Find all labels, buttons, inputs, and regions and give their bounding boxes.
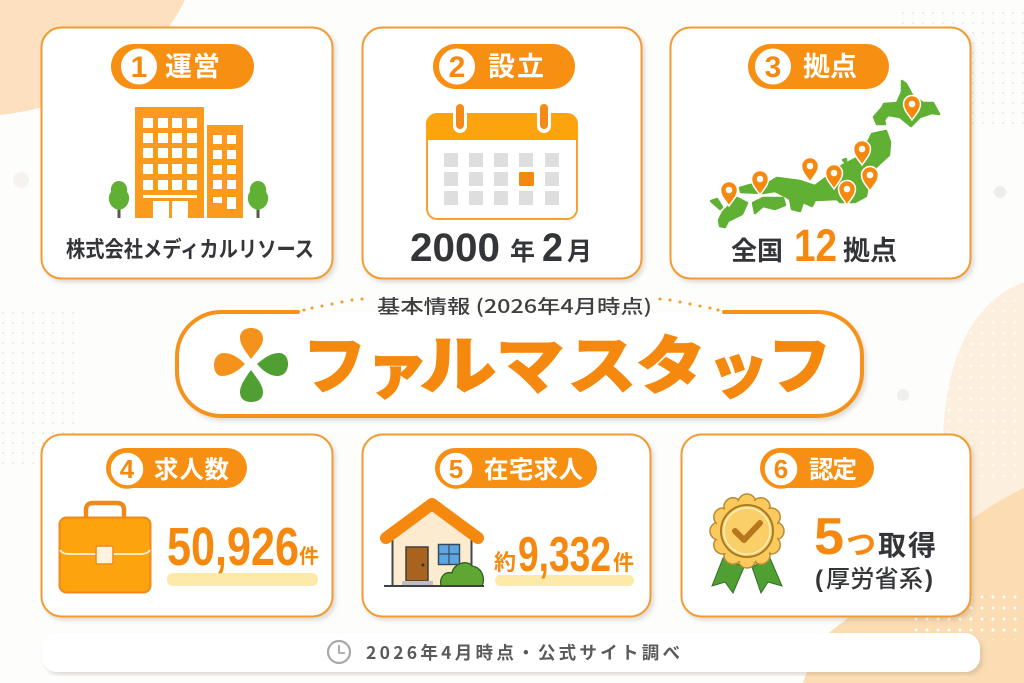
map of Japan [711, 81, 939, 227]
badge: 5 在宅求人 [435, 448, 597, 488]
title text: ス [568, 332, 636, 402]
title text: ァ [366, 337, 428, 406]
icon: tree right [248, 181, 268, 218]
badge: 4 求人数 [106, 448, 247, 488]
badge: 4 求人数: 4 [120, 454, 135, 484]
panel: 1 運営 [42, 28, 332, 278]
badge: 1 運営 [111, 44, 254, 89]
badge: 2 設立: 設立 [488, 45, 544, 84]
badge: 2 設立 [433, 44, 575, 89]
value: 5つ取得: 5 [814, 508, 844, 566]
founding date: 年 [510, 232, 535, 268]
title text: タ [636, 332, 706, 402]
icon: office buildings [135, 107, 243, 218]
background blob: bottom right [803, 488, 1024, 683]
badge: 2 設立: 2 [449, 51, 465, 84]
panel: 5 在宅求人 [362, 434, 650, 616]
section heading: 基本情報 (2026年4月時点) [377, 292, 652, 319]
badge: 3 拠点: 3 [765, 51, 781, 84]
value: 約9,332件: 件 [613, 547, 634, 577]
icon: clock [328, 641, 350, 663]
icon: medal [710, 494, 784, 593]
locations count [731, 220, 897, 271]
badge: 6 認定: 認定 [809, 451, 857, 486]
icon: briefcase [60, 503, 150, 592]
locations count: 全国 [731, 231, 783, 268]
badge: 1 運営: 1 [131, 51, 147, 84]
badge: 3 拠点 [748, 44, 889, 89]
badge: 4 求人数: 求人数 [154, 451, 230, 486]
value: 50,926件: 50,926 [167, 517, 299, 577]
note: 厚労省系: ) [925, 566, 933, 593]
panel: 6 認定 [682, 434, 970, 616]
value: 約9,332件: 9,332 [518, 528, 611, 582]
title text: マ [496, 332, 564, 402]
founding date: 2000 [410, 226, 500, 270]
icon: house [384, 504, 484, 586]
badge: 6 認定: 6 [774, 454, 788, 484]
title text: フ [768, 332, 831, 402]
title text: ル [420, 332, 496, 402]
badge: 3 拠点: 拠点 [803, 45, 857, 84]
value: 約9,332件: 約 [494, 545, 516, 577]
founding date: 月 [567, 232, 592, 268]
badge: 6 認定 [760, 448, 874, 488]
note: 厚労省系: 厚労省系 [826, 559, 923, 594]
background blob: top left [0, 0, 185, 115]
title text [303, 332, 831, 406]
badge: 5 在宅求人: 在宅求人 [484, 451, 584, 486]
title frame [177, 312, 862, 416]
panel: 2 設立 [362, 28, 642, 278]
company name: 株式会社メディカルリソース [66, 232, 314, 264]
footer note bar [42, 633, 980, 672]
panel: 3 拠点 [670, 28, 970, 278]
value: 50,926件: 件 [299, 540, 319, 569]
footer text: 2026年4月時点・公式サイト調べ [366, 640, 680, 665]
locations count: 12 [794, 220, 837, 271]
icon: tree left [109, 181, 129, 218]
note: 厚労省系: ( [815, 566, 823, 593]
map pins [720, 96, 920, 206]
title panel: ファルマスタッフ [177, 312, 862, 416]
title text: フ [303, 332, 366, 402]
value: 5つ取得: つ [846, 520, 876, 564]
icon: calendar [426, 103, 578, 219]
background blob: right light [943, 282, 1024, 683]
logo: clover [214, 328, 288, 402]
locations count: 拠点 [843, 229, 897, 268]
founding date: 2 [542, 226, 563, 270]
panel: 4 求人数 [42, 434, 332, 616]
value: 5つ取得 [814, 508, 936, 566]
founding date [410, 226, 592, 270]
dotted accents [302, 298, 720, 312]
badge: 1 運営: 運営 [165, 45, 220, 84]
badge: 5 在宅求人: 5 [449, 454, 463, 484]
value: 5つ取得: 取得 [878, 524, 936, 564]
title text: ッ [707, 337, 769, 406]
